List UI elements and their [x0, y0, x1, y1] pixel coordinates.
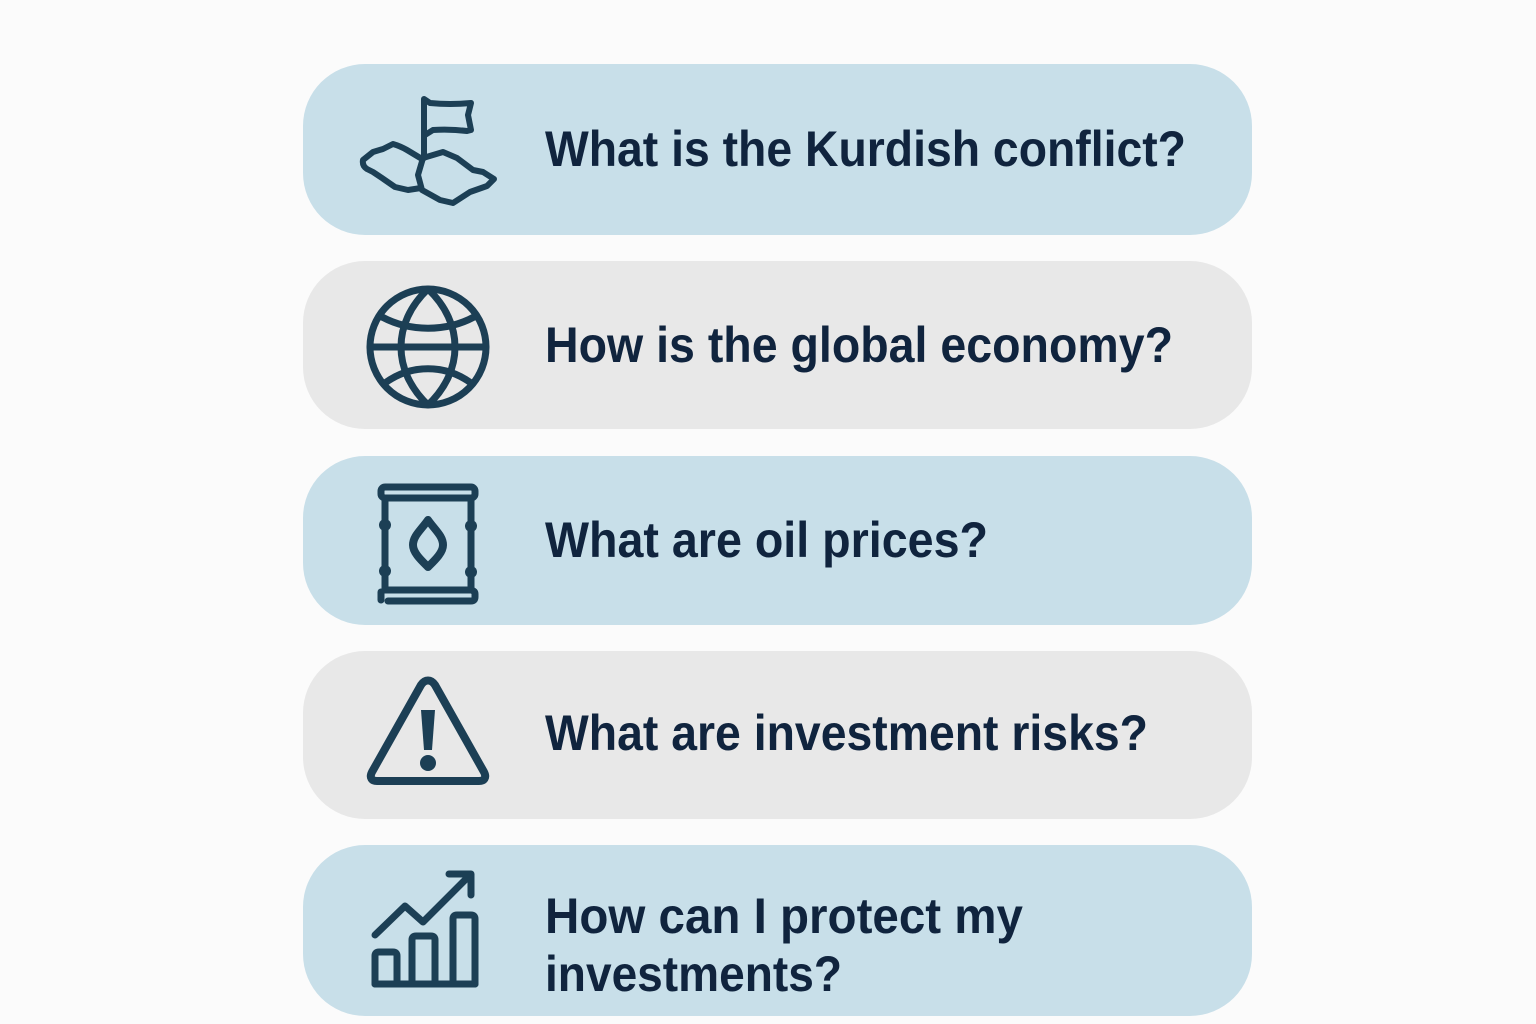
icon: warning triangle [371, 680, 485, 781]
panel: oil prices [303, 456, 1252, 625]
panel: investment risks [303, 651, 1252, 819]
heading: How can I protect my investments?: investments? [545, 946, 842, 1002]
heading: What is the Kurdish conflict?: What is the Kurdish conflict? [545, 121, 1186, 177]
icon: growth chart [375, 874, 475, 984]
heading: How can I protect my investments?: How can I protect my [545, 888, 1023, 944]
heading: What are investment risks?: What are investment risks? [545, 705, 1148, 761]
heading: What are oil prices?: What are oil prices? [545, 512, 988, 568]
panel: Kurdish conflict [303, 64, 1252, 235]
panel: protect investments [303, 845, 1252, 1016]
heading: How is the global economy?: How is the global economy? [545, 317, 1173, 373]
heading: How can I protect my investments? [545, 888, 1023, 1002]
icon: oil barrel [379, 487, 477, 601]
panel: global economy [303, 261, 1252, 429]
icon: globe [370, 289, 486, 405]
icon: flag over territories [363, 99, 494, 203]
